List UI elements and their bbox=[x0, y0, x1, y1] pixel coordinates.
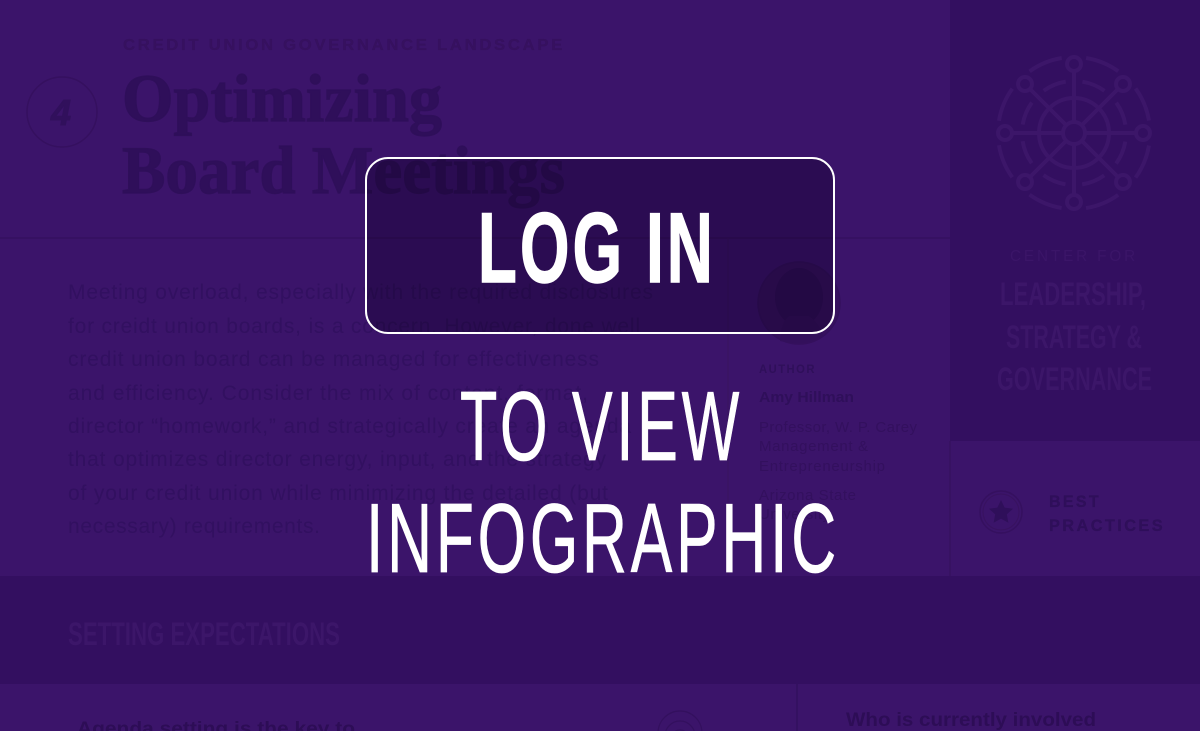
center label: CENTER FOR bbox=[1010, 248, 1138, 265]
intro paragraph: Meeting overload, especially with the required disclosures bbox=[68, 281, 653, 304]
intro paragraph: director “homework,” and strategically create an agenda bbox=[68, 415, 631, 438]
section band: setting expectations bbox=[0, 576, 1200, 684]
icon: star badge bbox=[980, 491, 1022, 533]
number badge: 4 bbox=[50, 92, 71, 133]
author title and affiliation: Arizona State bbox=[759, 487, 856, 504]
author label: AUTHOR bbox=[759, 364, 816, 376]
right column lead text: Who is currently involved bbox=[846, 710, 1096, 731]
author title and affiliation: Management & bbox=[759, 438, 868, 455]
center name bbox=[997, 276, 1152, 397]
author portrait bbox=[758, 262, 840, 344]
author title and affiliation: Professor, W. P. Carey bbox=[759, 419, 918, 436]
intro paragraph: that optimizes director energy, input, and the strategy bbox=[68, 448, 606, 471]
author name: Amy Hillman bbox=[759, 389, 854, 406]
author panel bbox=[758, 262, 918, 523]
icon: concentric arcs bbox=[658, 711, 702, 731]
log in button bbox=[366, 158, 834, 333]
title: Board Meetings bbox=[122, 132, 565, 208]
call to action text: INFOGRAPHIC bbox=[366, 483, 840, 593]
icon: network wheel bbox=[998, 57, 1150, 209]
author title and affiliation bbox=[759, 419, 918, 523]
intro paragraph: credit union board can be managed for effectiveness bbox=[68, 348, 599, 371]
eyebrow heading: CREDIT UNION GOVERNANCE LANDSCAPE bbox=[123, 37, 565, 54]
title bbox=[122, 60, 565, 208]
intro paragraph: and efficiency. Consider the mix of content, format, bbox=[68, 382, 588, 405]
best practices tag bbox=[980, 491, 1165, 535]
intro paragraph: for creidt union boards, is a concern. However, done well bbox=[68, 315, 640, 338]
title: Optimizing bbox=[122, 60, 442, 136]
best practices label: PRACTICES bbox=[1049, 516, 1165, 535]
number badge bbox=[27, 77, 97, 147]
author title and affiliation: University bbox=[759, 506, 830, 523]
button label: LOG IN bbox=[478, 192, 716, 303]
call to action text: TO VIEW bbox=[460, 371, 743, 481]
intro paragraph: of your credit union while minimizing the detailed (but bbox=[68, 482, 608, 505]
intro paragraph: necessary) requirements. bbox=[68, 515, 320, 538]
best practices label bbox=[1049, 492, 1165, 535]
lower content row bbox=[77, 684, 1096, 731]
author title and affiliation: Entrepreneurship bbox=[759, 458, 885, 475]
section heading: SETTING EXPECTATIONS bbox=[68, 616, 340, 652]
panel: center branding bbox=[950, 0, 1200, 441]
call to action text bbox=[366, 371, 840, 593]
intro paragraph bbox=[68, 281, 653, 538]
best practices label: BEST bbox=[1049, 492, 1101, 511]
header: eyebrow, number badge and title bbox=[27, 37, 565, 208]
